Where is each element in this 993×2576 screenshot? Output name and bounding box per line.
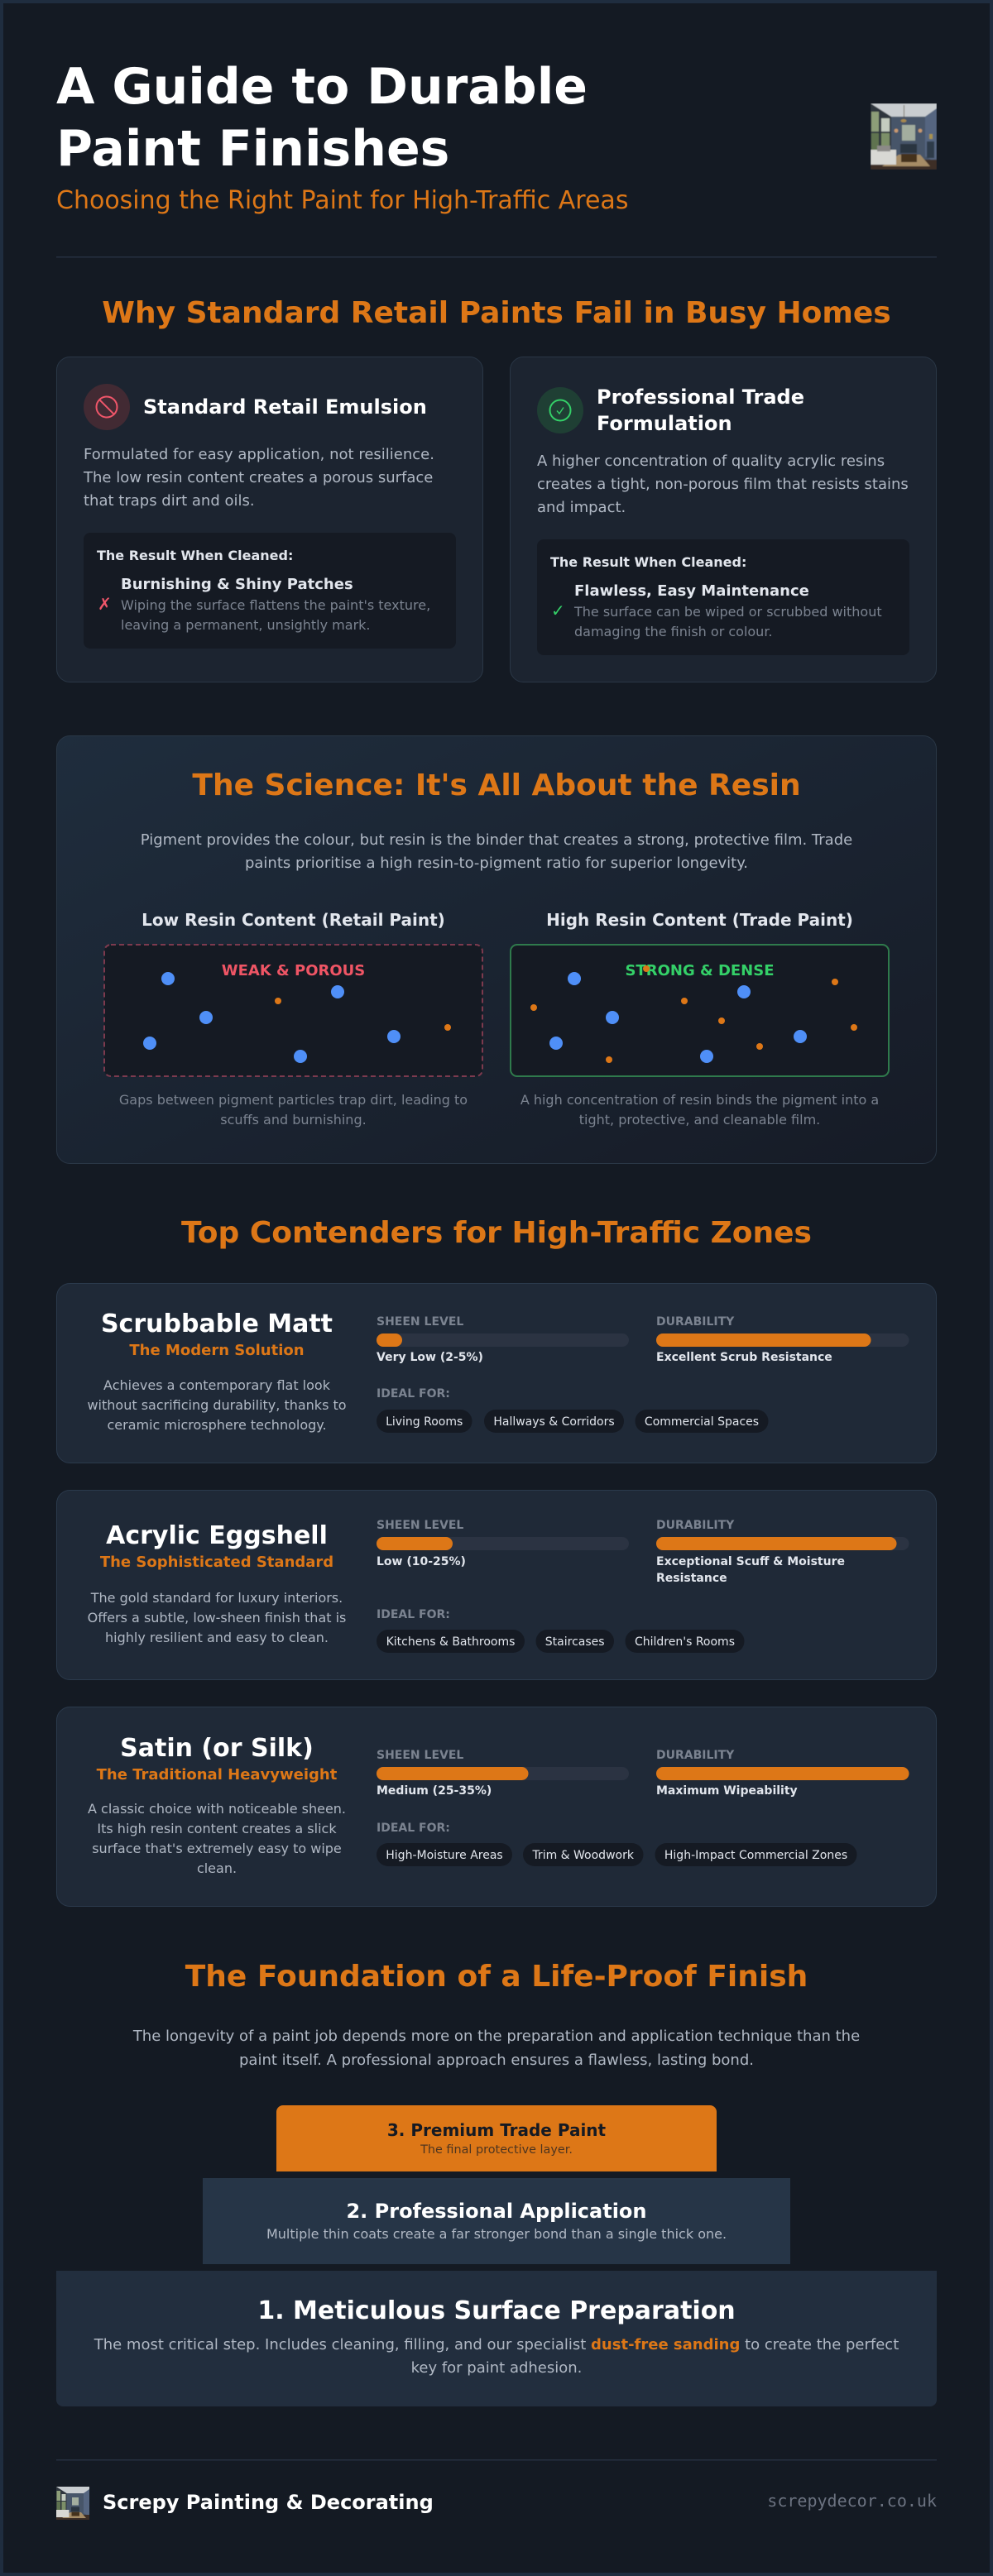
science heading: The Science: It's All About the Resin [192, 768, 801, 802]
durability bar: Exceptional Scuff & Moisture [656, 1555, 845, 1568]
panel: professional trade formulation [510, 357, 937, 682]
pyramid layer 1: surface preparation: 1. Meticulous Surface Preparation [257, 2296, 736, 2325]
product description: Offers a subtle, low-sheen finish that is [88, 1610, 346, 1626]
ideal for tags: Kitchens & Bathrooms [386, 1635, 515, 1649]
diagram: high resin: STRONG & DENSE [625, 962, 775, 979]
result box: The Result When Cleaned: [97, 548, 293, 563]
footer company name: Screpy Painting & Decorating [103, 2491, 434, 2514]
product description: Achieves a contemporary flat look [103, 1377, 331, 1393]
foundation intro: paint itself. A professional approach ensures a flawless, lasting bond. [239, 2052, 754, 2069]
product tagline: The Modern Solution [129, 1342, 305, 1359]
science intro [141, 831, 852, 872]
card description: and impact. [537, 499, 626, 516]
product name: Acrylic Eggshell [106, 1521, 328, 1550]
diagram: high resin: A high concentration of resin binds the pigment into a [520, 1092, 879, 1108]
header title: A Guide to Durable [56, 58, 588, 116]
footer website: screpydecor.co.uk [767, 2491, 937, 2511]
pyramid layer 2: professional application: Multiple thin coats create a far stronger bond than a single thick one. [266, 2226, 727, 2242]
durability bar: Resistance [656, 1572, 727, 1585]
footer logo [56, 2487, 89, 2520]
card title [597, 385, 804, 435]
ideal for tags: High-Impact Commercial Zones [664, 1849, 847, 1862]
product tagline: The Traditional Heavyweight [97, 1766, 338, 1784]
product description: without sacrificing durability, thanks to [87, 1397, 347, 1413]
pyramid layer 1: surface preparation [56, 2271, 937, 2406]
sheen bar: Medium (25-35%) [377, 1784, 492, 1798]
panel: scrubbable matt [56, 1284, 937, 1463]
ideal for tags: Hallways & Corridors [493, 1415, 615, 1429]
ideal for tags: Commercial Spaces [645, 1415, 759, 1429]
panel: standard retail emulsion [56, 357, 483, 682]
divider [56, 256, 937, 258]
ideal for tags: IDEAL FOR: [377, 1387, 450, 1401]
card description: Formulated for easy application, not resilience. [84, 446, 434, 463]
sheen bar [377, 1519, 629, 1568]
card description [537, 452, 909, 516]
section heading: foundation: The Foundation of a Life-Proof Finish [185, 1960, 808, 1994]
durability bar: DURABILITY [656, 1749, 735, 1762]
subtitle: Choosing the Right Paint for High-Traffic Areas [56, 186, 628, 215]
panel: acrylic eggshell [56, 1491, 937, 1679]
card description [83, 446, 434, 510]
section heading: top contenders: Top Contenders for High-Traffic Zones [181, 1216, 812, 1250]
pyramid layer 2: professional application [203, 2178, 790, 2264]
durability bar: Maximum Wipeability [656, 1784, 798, 1798]
panel: satin or silk [56, 1707, 937, 1906]
sheen bar [377, 1315, 629, 1364]
result box: The surface can be wiped or scrubbed without [573, 604, 882, 620]
result box: leaving a permanent, unsightly mark. [121, 617, 371, 633]
header title [56, 58, 588, 178]
header image: painted interior [871, 103, 937, 170]
pyramid layer 3: premium trade paint: 3. Premium Trade Paint [387, 2120, 607, 2140]
card title: Professional Trade [597, 385, 804, 409]
result box [537, 539, 909, 655]
card title: Standard Retail Emulsion [143, 395, 427, 419]
sheen bar: SHEEN LEVEL [377, 1519, 463, 1532]
science intro: paints prioritise a high resin-to-pigment ratio for superior longevity. [245, 855, 748, 872]
product name: Scrubbable Matt [101, 1310, 333, 1338]
pyramid layer 2: professional application: 2. Professional Application [346, 2200, 647, 2223]
durability bar: DURABILITY [656, 1519, 735, 1532]
durability bar: DURABILITY [656, 1315, 735, 1329]
product description [88, 1590, 346, 1645]
product description: clean. [197, 1860, 237, 1876]
durability bar [656, 1749, 909, 1798]
pyramid layer 1: surface preparation: key for paint adhesion. [411, 2359, 582, 2377]
ideal for tags: Staircases [545, 1635, 605, 1649]
product description: highly resilient and easy to clean. [105, 1630, 329, 1645]
sheen bar: Very Low (2-5%) [377, 1351, 483, 1364]
science intro: Pigment provides the colour, but resin is the binder that creates a strong, protective film. Trade [141, 831, 852, 849]
product description [88, 1801, 346, 1876]
card description: A higher concentration of quality acrylic resins [537, 452, 885, 470]
pyramid layer 1: surface preparation: The most critical step. Includes cleaning, filling, and our specialist dust-free sanding to create the perfect [94, 2336, 899, 2353]
ideal for tags [377, 1822, 857, 1866]
section heading: why retail fails: Why Standard Retail Paints Fail in Busy Homes [102, 296, 891, 330]
durability bar [656, 1519, 909, 1585]
diagram: low resin: scuffs and burnishing. [220, 1112, 367, 1128]
icon: prohibited [84, 384, 130, 430]
product description [87, 1377, 347, 1433]
card title: Formulation [597, 412, 732, 435]
product description: ceramic microsphere technology. [107, 1417, 327, 1433]
diagram: low resin: WEAK & POROUS [222, 962, 365, 979]
diagram: high resin: tight, protective, and cleanable film. [579, 1112, 820, 1128]
product tagline: The Sophisticated Standard [100, 1554, 333, 1571]
ideal for tags [377, 1608, 745, 1653]
result box: Flawless, Easy Maintenance [574, 582, 809, 600]
ideal for tags: IDEAL FOR: [377, 1822, 450, 1835]
foundation intro: The longevity of a paint job depends more on the preparation and application technique than the [132, 2028, 860, 2045]
result box [84, 533, 456, 649]
result box: Burnishing & Shiny Patches [121, 576, 353, 593]
card description: creates a tight, non-porous film that resists stains [537, 476, 909, 493]
ideal for tags: IDEAL FOR: [377, 1608, 450, 1621]
icon: check [537, 387, 583, 433]
ideal for tags [377, 1387, 768, 1433]
diagram: low resin: Gaps between pigment particles trap dirt, leading to [119, 1092, 468, 1108]
product description: A classic choice with noticeable sheen. [88, 1801, 346, 1817]
panel: the science [56, 736, 937, 1163]
diagram: low resin [104, 910, 482, 1128]
sheen bar [377, 1749, 629, 1798]
product description: surface that's extremely easy to wipe [92, 1841, 342, 1856]
result box: ✓ [551, 601, 565, 620]
sheen bar: SHEEN LEVEL [377, 1315, 463, 1329]
pyramid layer 3: premium trade paint [276, 2105, 717, 2171]
sheen bar: SHEEN LEVEL [377, 1749, 463, 1762]
diagram: high resin [511, 910, 889, 1128]
ideal for tags: Living Rooms [386, 1415, 463, 1429]
ideal for tags: High-Moisture Areas [386, 1849, 503, 1862]
header title: Paint Finishes [56, 120, 449, 178]
result box: ✗ [98, 594, 112, 614]
diagram: low resin: Low Resin Content (Retail Paint) [142, 910, 445, 930]
product description: Its high resin content creates a slick [97, 1821, 337, 1836]
sheen bar: Low (10-25%) [377, 1555, 466, 1568]
pyramid layer 3: premium trade paint: The final protective layer. [420, 2143, 573, 2157]
ideal for tags: Trim & Woodwork [531, 1849, 635, 1862]
diagram: high resin: High Resin Content (Trade Paint) [546, 910, 853, 930]
card description: The low resin content creates a porous surface [83, 469, 433, 486]
product description: The gold standard for luxury interiors. [90, 1590, 343, 1606]
product name: Satin (or Silk) [120, 1734, 314, 1763]
divider [56, 2459, 937, 2460]
durability bar: Excellent Scrub Resistance [656, 1351, 832, 1364]
ideal for tags: Children's Rooms [635, 1635, 735, 1649]
durability bar [656, 1315, 909, 1364]
result box: Wiping the surface flattens the paint's texture, [121, 597, 430, 613]
foundation intro [132, 2028, 860, 2069]
card description: that traps dirt and oils. [84, 492, 255, 510]
result box: damaging the finish or colour. [574, 624, 773, 639]
result box: The Result When Cleaned: [550, 554, 746, 570]
